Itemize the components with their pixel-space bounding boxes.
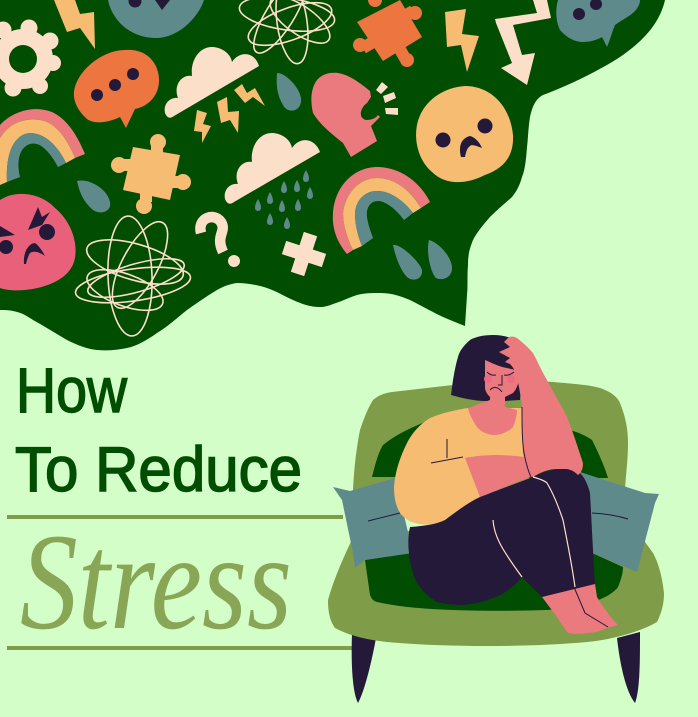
icon: blue drop lower left (77, 181, 110, 212)
icon: scribble top (237, 0, 337, 66)
icon: two blue drops (393, 240, 452, 280)
illustration: woman on armchair (328, 335, 664, 703)
icon: rainbow left (0, 109, 85, 185)
title: How To Reduce: How (16, 356, 127, 426)
raised arm and hand (499, 336, 583, 477)
chair back (353, 381, 628, 490)
chair seat (328, 530, 664, 646)
icon: question mark (200, 217, 240, 267)
blue pillows (333, 472, 659, 572)
bottom divider line (7, 646, 353, 650)
top divider line (7, 515, 343, 519)
title: How To Reduce (15, 356, 302, 505)
dark back cushion (372, 420, 608, 478)
icon: orange puzzle piece (353, 0, 422, 67)
icon: rainbow right (333, 167, 430, 254)
icon: plus sign (278, 228, 330, 280)
dark seat cushion (365, 553, 623, 611)
chair legs (352, 632, 640, 703)
thought cloud panel (0, 0, 665, 350)
feet (542, 584, 618, 634)
icon: orange sad face (416, 86, 513, 182)
icon: scribble bottom (73, 214, 193, 337)
hair (451, 335, 522, 401)
icon: rain cloud (225, 133, 320, 229)
yellow shirt and arm (394, 408, 530, 525)
icon: small lightning bolts (194, 84, 265, 143)
clothing and body lines (431, 407, 608, 627)
icon: shouting head (311, 73, 398, 157)
icon: zigzag arrow (495, 0, 551, 85)
icon: blue speech bubble top right (556, 0, 640, 47)
bare midriff (465, 455, 530, 497)
icon: storm cloud (165, 47, 259, 118)
icon: blue sad face top (108, 0, 204, 38)
neck and chest (468, 395, 517, 435)
icon: blue drop (277, 73, 301, 111)
icon: lightning top left (54, 0, 95, 49)
title: How To Reduce: To Reduce (15, 435, 302, 505)
title: Stress script word: Stress (20, 505, 292, 658)
face (484, 360, 520, 397)
icon: angry pink face (0, 194, 76, 290)
black trousers (408, 469, 595, 605)
icon: gear (0, 20, 61, 96)
icon: orange speech bubble (74, 50, 159, 128)
icon: yellow puzzle piece (111, 134, 191, 214)
icon: big lightning bolt (445, 9, 479, 72)
